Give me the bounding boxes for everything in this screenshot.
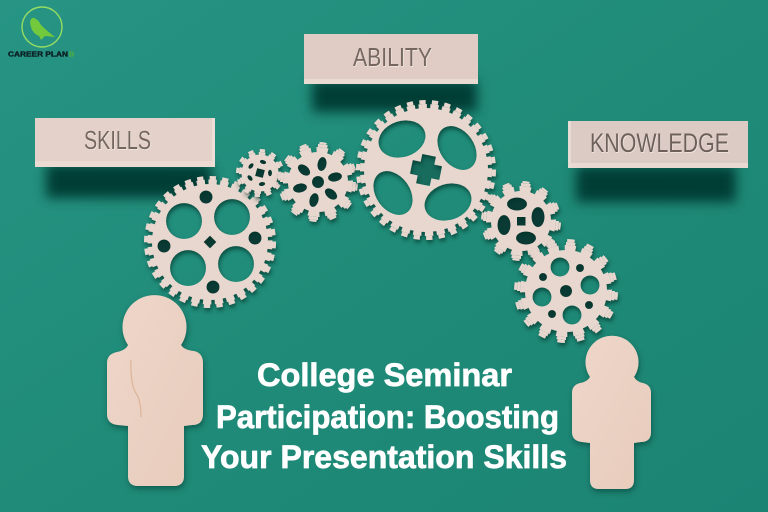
gear: large centre [358, 102, 494, 238]
block shadows [46, 80, 736, 202]
logo: green letter: B [69, 50, 75, 58]
label: skills: SKILLS [84, 125, 151, 155]
title line 2: Participation: Boosting [216, 399, 559, 435]
logo: Career Plan B [8, 7, 68, 58]
figure: left wooden person [107, 295, 203, 486]
block: skills [35, 118, 215, 167]
dark areas seen through gear holes [157, 155, 594, 319]
figure: right wooden person [572, 336, 651, 489]
title [201, 357, 567, 475]
gear: small top [238, 150, 282, 196]
block: knowledge [568, 121, 748, 168]
gear: medium right [482, 182, 560, 260]
title line 3: Your Presentation Skills [201, 439, 567, 475]
gear: large left [146, 178, 274, 306]
label: ability: ABILITY [353, 42, 432, 72]
gear: lower right [516, 240, 616, 342]
block: ability [304, 34, 478, 84]
icon: green bird [30, 18, 55, 40]
title line 1: College Seminar [257, 357, 512, 393]
label: knowledge: KNOWLEDGE [590, 128, 729, 158]
gear: medium with petals [279, 143, 357, 221]
logo wordmark: CAREER PLAN [8, 50, 68, 58]
